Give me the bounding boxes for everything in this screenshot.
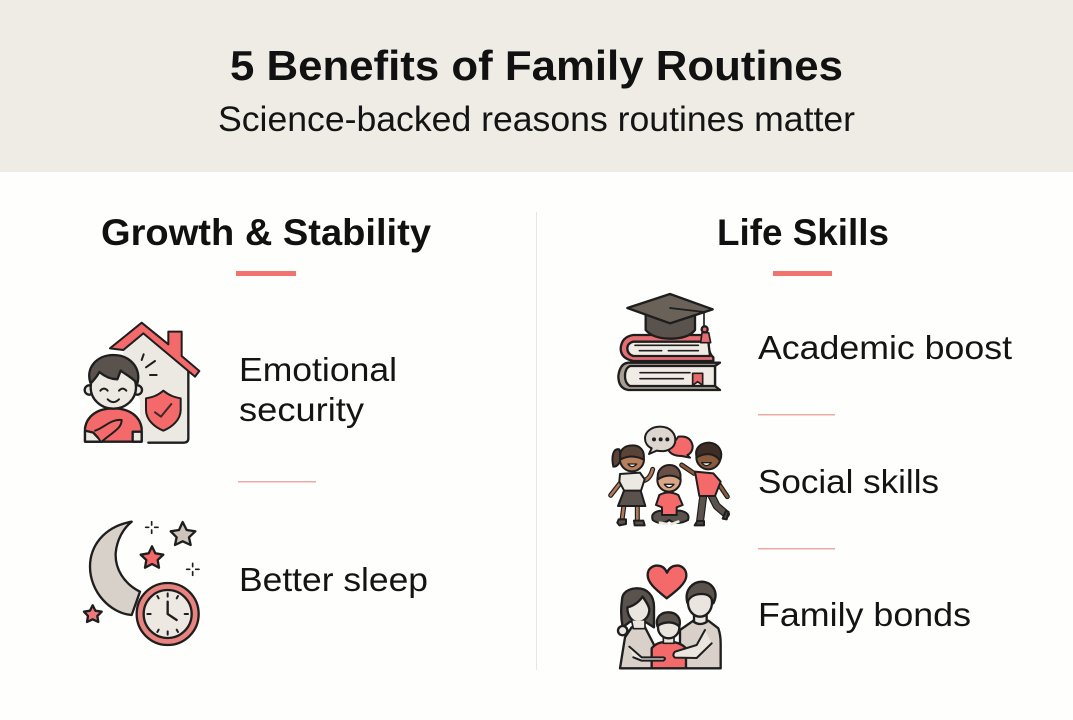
label: family bonds: Family bonds [758,596,971,633]
label: academic boost: Academic boost [758,329,1012,366]
icon: child at home with shield [85,323,199,443]
panel: growth and stability [84,212,431,645]
icon: graduation cap on books [618,294,720,390]
header band [0,0,1073,172]
label: better sleep: Better sleep [239,561,428,598]
icon: three children talking [611,427,729,525]
heading: growth and stability: Growth & Stability [101,212,431,253]
label: emotional security: Emotional [239,351,397,388]
icon: family hug with heart [618,566,721,668]
label: emotional security [239,351,397,428]
label: social skills: Social skills [758,463,939,500]
panel: life skills [611,212,1012,668]
girl [611,445,653,525]
seated boy [652,465,689,524]
subtitle: Science-backed reasons routines matter [218,100,855,139]
boy with raised arm [682,443,729,525]
label: emotional security: security [239,391,365,428]
title: 5 Benefits of Family Routines [230,42,843,89]
heading: life skills: Life Skills [717,212,889,253]
icon: moon, stars and clock [84,522,199,645]
